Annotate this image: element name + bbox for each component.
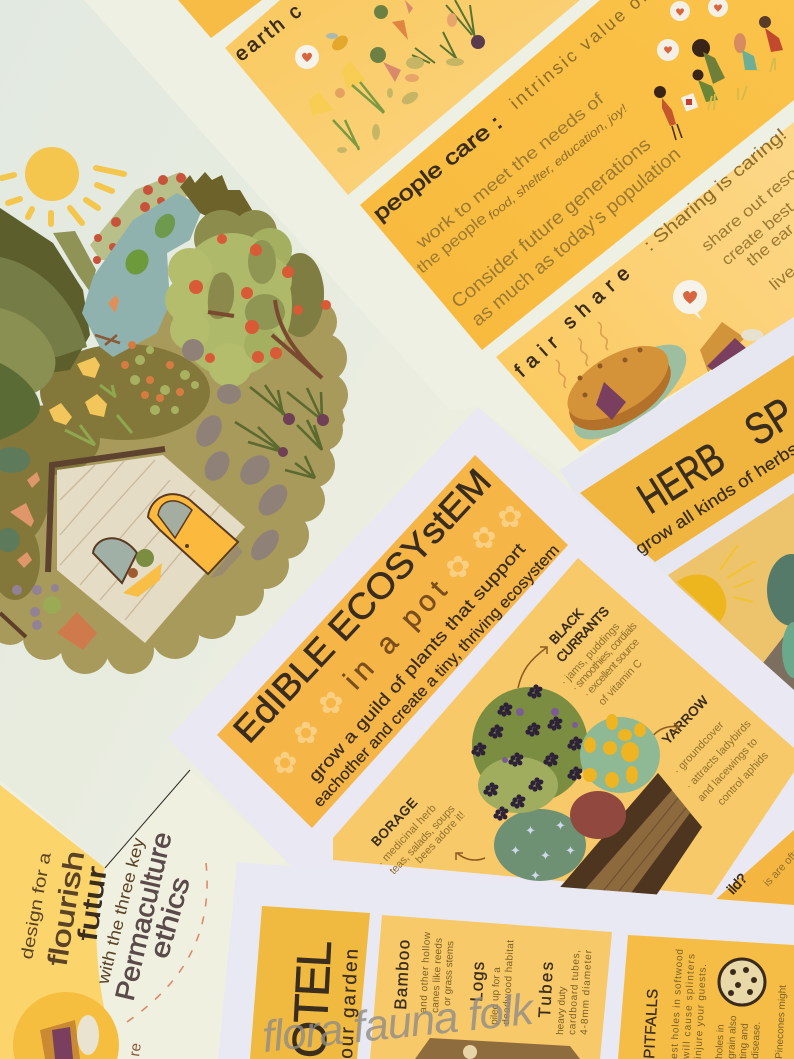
- card: herb spiral: [560, 317, 794, 740]
- icon: pie circle: [13, 992, 119, 1059]
- illustration: pie on leaf plate: [556, 322, 763, 456]
- red flowers: [570, 791, 626, 839]
- label: black currants: · jams, puddings: [558, 620, 623, 688]
- label: borage: [368, 795, 468, 877]
- door: [148, 494, 238, 574]
- card: insect hotel: [218, 862, 794, 1059]
- text: pitfalls: injure your guests.: [693, 964, 709, 1059]
- panel: plant guide: [333, 558, 794, 897]
- card: edible ecosystem: [168, 407, 794, 1000]
- illustration: vegetables and flowers: [309, 0, 485, 153]
- dashed arrow: [127, 863, 207, 1022]
- label: yarrow: YARROW: [659, 692, 712, 747]
- text: pitfalls: disease.: [750, 1021, 763, 1059]
- heading: herb: HERB: [629, 433, 733, 523]
- panel: people care: [360, 0, 794, 350]
- illustration: people sharing: [654, 0, 783, 140]
- decorative flowers: ✿: [471, 522, 497, 555]
- text: flourishing: flourish: [42, 849, 90, 968]
- text: with the three key: with the three key: [93, 835, 148, 987]
- card: garden illustration: [0, 0, 450, 868]
- panel: fair share: [496, 122, 794, 456]
- icon: pinecone circle: [719, 959, 765, 1005]
- brush: [180, 172, 260, 230]
- borage plant: ✦: [530, 868, 541, 883]
- label: borage: · medicinal herb: [375, 802, 439, 869]
- body: people line: the people: [414, 210, 491, 277]
- body: share out resources: create best: [719, 199, 794, 269]
- decorative flowers: ✿: [497, 501, 523, 534]
- label: borage: teas, salads, soups: [387, 803, 458, 877]
- slice of pie: [700, 322, 763, 372]
- decoration: steam wiggles: [556, 322, 608, 388]
- text: pitfalls: est holes in softwood: [669, 949, 686, 1059]
- shadow under door: [210, 545, 243, 578]
- black currant bush: [471, 684, 588, 821]
- vegetable rows: [182, 339, 329, 565]
- body: share out resources: [699, 165, 794, 294]
- label: yarrow: · attracts ladybirds: [683, 718, 754, 792]
- label: borage: BORAGE: [368, 795, 420, 849]
- strawberry patch: [90, 172, 197, 264]
- text: fragment: re: [126, 1042, 145, 1058]
- text: tubes: [535, 949, 594, 1035]
- label: yarrow: [659, 692, 771, 808]
- label: yarrow: control aphids: [715, 749, 771, 808]
- text: bamboo: canes like reeds: [430, 938, 445, 1013]
- heading: fair: fair: [511, 332, 563, 382]
- text: bamboo: [391, 931, 456, 1013]
- pot with plant: [0, 584, 97, 650]
- body: tiny ecosystem: eachother and create a tiny, thriving ecosystem: [310, 542, 563, 811]
- panel: herb title band: [580, 355, 794, 562]
- heading: hotel: OTEL: [283, 939, 342, 1059]
- heading: earth care: earth c: [231, 1, 306, 66]
- subheading: grow herbs: grow all kinds of herbs: [632, 439, 794, 558]
- text: bamboo: Bamboo: [391, 939, 414, 1010]
- text: design for a: design for a: [17, 850, 55, 961]
- heading: ethics: ethics: [144, 874, 196, 962]
- decorative flowers: [272, 501, 523, 780]
- flowers and shrub: [0, 341, 199, 568]
- yarrow plant: [580, 714, 660, 793]
- house: [48, 449, 245, 643]
- panel: herb illustration: [668, 493, 794, 700]
- text: pitfalls: [641, 949, 763, 1059]
- text: logs: Logs: [467, 961, 488, 1002]
- body: guild of plants: grow a guild of plants that support: [305, 539, 529, 786]
- text: future: futur: [72, 864, 112, 943]
- text: bamboo: or grass stems: [442, 941, 456, 1006]
- illustration: barrel planter: [471, 684, 702, 897]
- heart bubbles: [657, 0, 728, 61]
- heading: people care: people care :: [369, 111, 507, 226]
- panel: pitfalls: [618, 935, 794, 1059]
- card: permaculture ethics: [84, 0, 794, 470]
- icon: heart bubble: [295, 45, 319, 69]
- text: pitfalls: will cause splinters: [681, 954, 697, 1059]
- arrow: to black currants: [518, 647, 547, 688]
- text: tubes: Tubes: [535, 961, 557, 1018]
- panel: edge question: ild?: [723, 870, 750, 897]
- borage plant: ✦: [525, 823, 536, 838]
- text: tubes: cardboard tubes,: [567, 950, 582, 1035]
- text: logs: [467, 939, 516, 1025]
- heading: permaculture: Permaculture: [110, 829, 178, 1003]
- herb plant: [763, 554, 794, 695]
- text: pitfalls: PITFALLS: [641, 988, 662, 1059]
- body: share out resources: share out reso: [699, 165, 794, 255]
- label: black currants: · smoothies, cordials: [569, 620, 640, 694]
- illustration: hotel top: [415, 1038, 580, 1059]
- panel: yellow edge: [0, 785, 117, 1059]
- subheading: sharing is caring: : Sharing is caring!: [640, 124, 790, 255]
- label: yarrow: and lacewings to: [695, 736, 760, 804]
- panel: hotel title: [250, 906, 370, 1059]
- icon: sun: [2, 147, 124, 224]
- window and planter: [93, 538, 162, 597]
- decorative flowers: ✿: [445, 551, 471, 584]
- dark crease: [105, 770, 190, 868]
- decorative flowers: ✿: [293, 717, 319, 750]
- subheading: your garden: our garden: [336, 948, 363, 1059]
- panel: title: [217, 455, 568, 828]
- borage plant: ✦: [540, 848, 551, 863]
- text: logs: piled up for a: [489, 966, 503, 1025]
- illustration: scalloped garden ground: [0, 260, 348, 674]
- decorative flowers: ✿: [318, 687, 344, 720]
- body: future generations: Consider future generations: [448, 134, 655, 313]
- text: logs: deadwood habitat: [501, 939, 516, 1025]
- text: bamboo: and other hollow: [418, 931, 433, 1013]
- borage plant: ✦: [510, 843, 521, 858]
- decorative flowers: ✿: [272, 747, 298, 780]
- note: food shelter education joy: food, shelter, education, joy!: [485, 101, 630, 222]
- label: black currants: · excellent source: [581, 636, 642, 700]
- text: pitfalls: grain also: [726, 1015, 739, 1059]
- hills: [0, 208, 96, 440]
- dark ground shrub band: [0, 344, 210, 600]
- body: needs text: work to meet the needs of: [412, 89, 607, 253]
- label: black currants: BLACK: [546, 605, 586, 647]
- subheading: in a pot: in a pot: [338, 575, 453, 696]
- borage plant: ✦: [555, 818, 566, 833]
- label: black currants: [546, 603, 645, 708]
- label: black currants: of vitamin C: [596, 657, 645, 708]
- pond: [82, 193, 203, 357]
- text: pitfalls: holes in: [714, 1024, 727, 1059]
- panel: edge question: [715, 830, 794, 910]
- label: black currants: CURRANTS: [553, 603, 612, 665]
- card: bottom left ethics: [0, 770, 285, 1059]
- heading: edible ecosystem: EdIBLE ECOSYstEM: [225, 461, 499, 750]
- heading: share: share: [559, 262, 634, 334]
- text: pitfalls: ting and: [738, 1023, 751, 1059]
- borage plant: ✦: [565, 843, 576, 858]
- icon: bee: [326, 33, 351, 53]
- icon: half sun: [677, 575, 726, 622]
- body: share out resources: the ear: [744, 221, 794, 270]
- panel: earth care: [225, 0, 580, 195]
- body: today's population: as much as today's population: [468, 144, 685, 331]
- fruit tree: [165, 210, 331, 387]
- borage plant: [494, 809, 586, 883]
- icon: heart bubble: [673, 280, 707, 320]
- text: tubes: 4-8mm diameter: [579, 949, 594, 1035]
- panel: top corner band: [178, 0, 262, 38]
- text: tubes: heavy duty: [555, 986, 569, 1035]
- text: right edge: Pinecones might: [774, 985, 789, 1059]
- label: yarrow: · groundcover: [671, 719, 727, 777]
- arrow: to yarrow: [652, 723, 679, 737]
- label: borage: bees adore it!: [413, 809, 468, 866]
- panel: materials: [370, 915, 612, 1059]
- arrow: to borage: [456, 853, 485, 860]
